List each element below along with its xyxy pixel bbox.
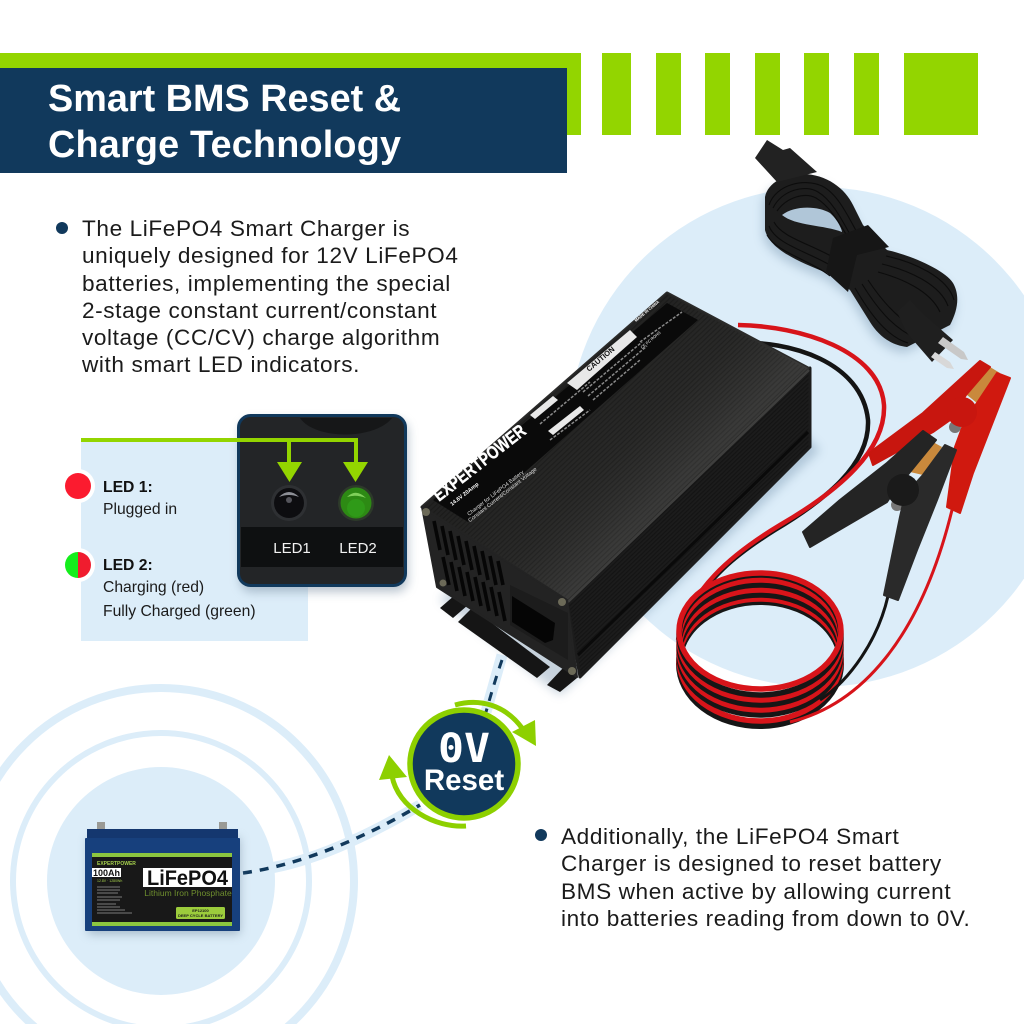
arrow: upper clockwise <box>455 702 536 746</box>
image: black clamp <box>803 431 956 600</box>
text block: charger description: 2-stage constant current/constant <box>82 298 437 323</box>
text block: BMS reset description <box>535 824 970 931</box>
dashed connector: battery to reset <box>243 655 502 873</box>
image: LiFePO4 battery: EXPERTPOWER <box>97 861 136 867</box>
text block: charger description: batteries, implementing the special <box>82 271 451 296</box>
panel: LED photo: LED1 <box>273 540 311 557</box>
charger label: CE FC ROHS <box>639 330 662 350</box>
image: LiFePO4 battery: DEEP CYCLE BATTERY <box>178 913 223 918</box>
title: Charge Technology <box>48 124 401 166</box>
image: red clamp <box>869 361 1010 513</box>
text: LED 2 <box>103 557 256 620</box>
icon: LED 1 lens <box>271 485 307 521</box>
charger label: CAUTION <box>585 345 616 374</box>
text block: BMS reset description: BMS when active by allowing current <box>561 879 951 904</box>
text: LED 2: Charging (red) <box>103 579 204 596</box>
charger label: Charger for LiFePO4 Battery <box>467 470 526 518</box>
text block: charger description: uniquely designed for 12V LiFePO4 <box>82 243 459 268</box>
charger label: Constant Current/Constant Voltage <box>467 467 538 524</box>
badge: 0V Reset <box>379 702 536 826</box>
text block: BMS reset description: into batteries reading from down to 0V. <box>561 906 970 931</box>
concentric circles behind battery <box>0 688 354 1024</box>
text block: BMS reset description: Charger is designed to reset battery <box>561 851 942 876</box>
text block: charger description: voltage (CC/CV) charge algorithm <box>82 325 440 350</box>
icon: LED 1 red dot <box>61 469 95 503</box>
panel: LED photo <box>238 416 408 592</box>
arrow: lower clockwise <box>379 755 466 826</box>
image: charger <box>422 293 820 695</box>
charger label: EXPERTPOWER <box>429 420 530 505</box>
badge: 0V Reset: Reset <box>424 764 504 797</box>
image: LiFePO4 battery <box>85 822 240 934</box>
charger label <box>429 299 698 524</box>
text block: charger description: with smart LED indicators. <box>81 352 360 377</box>
charger label: MADE IN CHINA <box>633 299 660 323</box>
vents <box>434 521 505 621</box>
background circle behind charger <box>568 187 1024 687</box>
coil <box>679 573 841 726</box>
panel: LED photo: LED2 <box>339 540 377 557</box>
arrows pointing to LEDs <box>81 438 368 482</box>
text: LED 1: LED 1: <box>103 479 153 496</box>
front face <box>422 507 577 677</box>
title <box>0 68 567 173</box>
plug <box>897 300 968 369</box>
AC socket <box>510 585 568 660</box>
badge: 0V Reset: 0V <box>438 726 490 772</box>
image: power cord <box>755 140 968 369</box>
screws <box>422 508 576 675</box>
image: LiFePO4 battery: 12.8V · 1280Wh <box>97 879 122 883</box>
charger label: 14.6V 20Amp <box>450 481 481 508</box>
top face <box>422 293 808 600</box>
text: LED 2: Fully Charged (green) <box>103 603 256 620</box>
image: LiFePO4 battery: 100Ah <box>93 868 120 878</box>
panel: LED legend <box>61 440 308 641</box>
image: LiFePO4 battery: EP12100 <box>192 908 210 913</box>
text block: charger description: The LiFePO4 Smart Charger is <box>82 216 410 241</box>
title: Smart BMS Reset & <box>48 78 401 120</box>
clamp wires <box>790 510 952 722</box>
icon: LED 2 lens <box>338 485 374 521</box>
image: LiFePO4 battery: LiFePO4 <box>147 867 228 890</box>
image: battery cables with coil <box>678 325 952 726</box>
connector <box>755 140 817 182</box>
image: LiFePO4 battery: Lithium Iron Phosphate <box>144 888 232 898</box>
strap <box>826 225 889 292</box>
icon: LED 2 red and green dot <box>61 548 95 582</box>
text: LED 2: LED 2: <box>103 557 153 574</box>
header stripes <box>0 53 978 135</box>
text: LED 1: Plugged in <box>103 501 177 518</box>
text: LED 1 <box>103 479 177 518</box>
side face <box>567 368 810 677</box>
text block: BMS reset description: Additionally, the LiFePO4 Smart <box>561 824 900 849</box>
text block: charger description <box>56 216 459 377</box>
feet <box>440 595 577 692</box>
